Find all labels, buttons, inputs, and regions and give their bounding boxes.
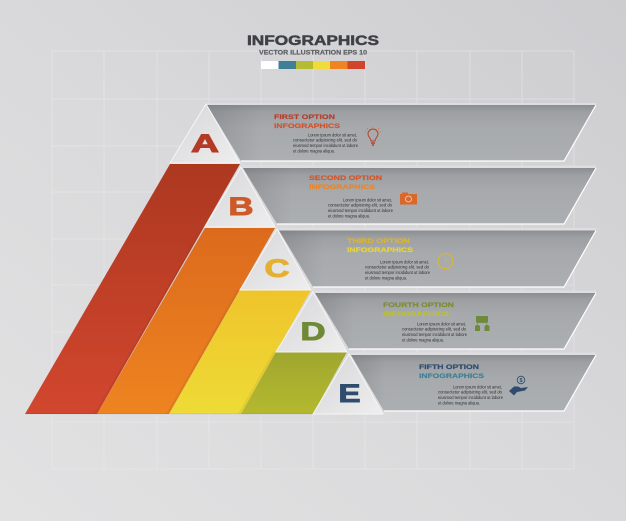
subheading 2: INFOGRAPHICS — [309, 184, 376, 191]
body text 3 — [365, 260, 430, 282]
heading 1: FIRST OPTION — [274, 114, 335, 121]
body text 1: eiusmod tempor incididunt ut labore — [293, 143, 358, 149]
panel shape 5 — [351, 352, 596, 411]
panel: third option — [279, 228, 596, 287]
panel: fourth option — [315, 290, 596, 349]
icon: light bulb — [365, 127, 381, 145]
subtitle: VECTOR ILLUSTRATION EPS 10 — [259, 50, 368, 56]
body text 3: et dolore magna aliqua. — [365, 276, 407, 282]
band: orange — [97, 228, 275, 414]
colour legend strip — [261, 61, 365, 69]
body text 1: consectetur adipisicing elit, sed do — [293, 138, 357, 144]
body text 2: et dolore magna aliqua. — [328, 214, 370, 220]
panel shape 4 — [315, 290, 596, 349]
body text 1: Lorem ipsum dolor sit amet, — [308, 132, 357, 138]
heading 2: SECOND OPTION — [309, 175, 382, 182]
triangle D — [276, 292, 347, 352]
band: green — [241, 352, 347, 414]
body text 5: consectetur adipisicing elit, sed do — [438, 390, 502, 396]
triangle C: C — [264, 255, 290, 283]
body text 1 — [293, 132, 358, 154]
body text 1: et dolore magna aliqua. — [293, 148, 335, 154]
band: yellow — [169, 290, 311, 414]
panel shape 3 — [279, 228, 596, 287]
triangle A — [170, 104, 240, 163]
body text 5: eiusmod tempor incididunt ut labore — [438, 395, 503, 401]
panel: first option — [207, 103, 596, 161]
triangle E — [313, 354, 383, 414]
body text 2: eiusmod tempor incididunt ut labore — [328, 208, 393, 214]
heading 3: THIRD OPTION — [347, 238, 410, 245]
body text 2: consectetur adipisicing elit, sed do — [328, 202, 392, 208]
band: red — [25, 164, 240, 414]
body text 5 — [438, 384, 503, 406]
body text 3: eiusmod tempor incididunt ut labore — [365, 270, 430, 276]
heading 5: FIFTH OPTION — [419, 364, 479, 371]
body text 4 — [402, 322, 467, 344]
body text 3: consectetur adipisicing elit, sed do — [365, 264, 429, 270]
icon: presenters — [475, 316, 490, 331]
heading 4: FOURTH OPTION — [383, 302, 454, 309]
triangle B — [205, 167, 275, 227]
panel: fifth option — [351, 352, 596, 411]
body text 4: eiusmod tempor incididunt ut labore — [402, 332, 467, 338]
body text 2: Lorem ipsum dolor sit amet, — [343, 198, 392, 204]
body text 4: consectetur adipisicing elit, sed do — [402, 326, 466, 332]
subheading 1: INFOGRAPHICS — [274, 123, 341, 130]
body text 4: et dolore magna aliqua. — [402, 338, 444, 344]
subheading 4: INFOGRAPHICS — [383, 311, 450, 318]
triangle B: B — [228, 193, 254, 221]
band edge shading — [25, 228, 313, 414]
triangle C — [240, 229, 311, 290]
body text 5: Lorem ipsum dolor sit amet, — [453, 384, 502, 390]
body text 2 — [328, 198, 393, 220]
subheading 5: INFOGRAPHICS — [419, 373, 485, 380]
triangle D: D — [300, 318, 326, 346]
panel: second option — [243, 166, 596, 224]
panel shape 2 — [243, 166, 596, 224]
title: INFOGRAPHICS — [247, 33, 379, 48]
triangle E: E — [338, 380, 360, 408]
icon: hand with coin: $ — [519, 378, 523, 384]
panel shape 1 — [207, 103, 596, 161]
body text 4: Lorem ipsum dolor sit amet, — [417, 322, 466, 328]
icon: banknote — [400, 192, 417, 204]
pyramid colour bands — [25, 164, 347, 414]
body text 3: Lorem ipsum dolor sit amet, — [380, 260, 429, 266]
triangle A: A — [191, 130, 219, 158]
subheading 3: INFOGRAPHICS — [347, 247, 414, 254]
icon: clock — [438, 254, 453, 268]
icon: hand with coin — [509, 376, 528, 396]
body text 5: et dolore magna aliqua. — [438, 400, 480, 406]
